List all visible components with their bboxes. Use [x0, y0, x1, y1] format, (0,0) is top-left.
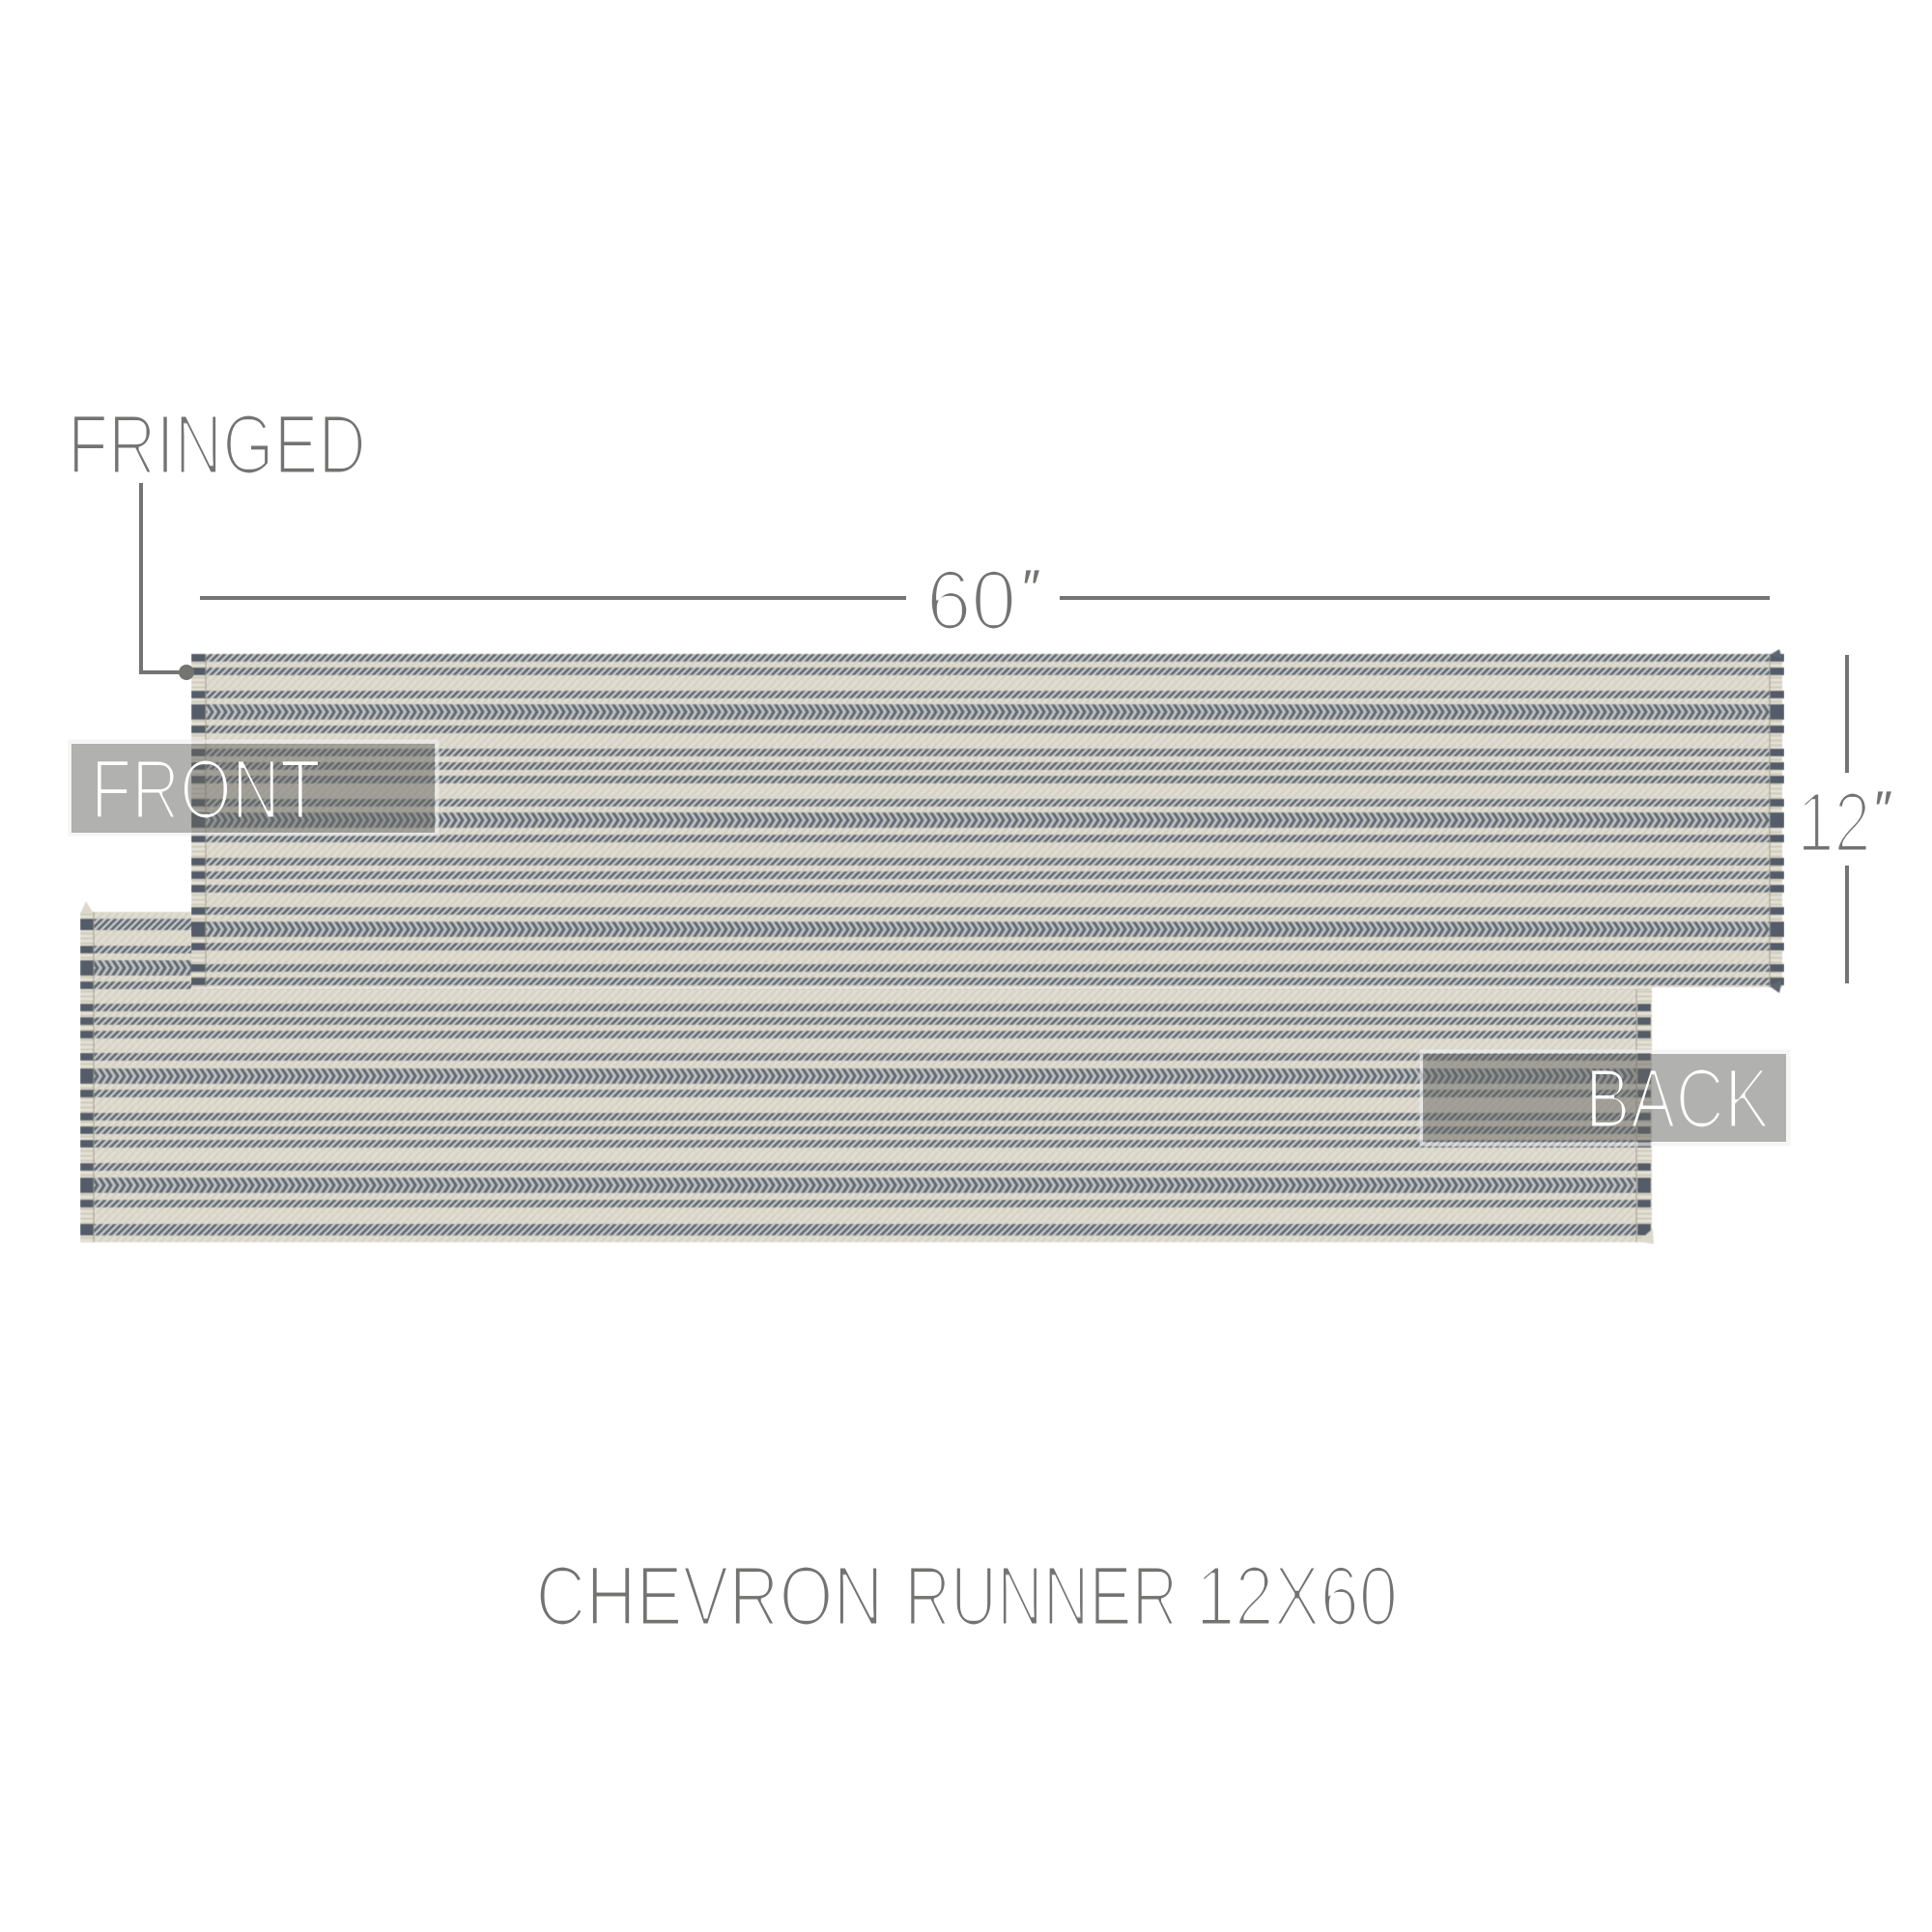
leader dot	[179, 665, 194, 680]
back fringe right	[1636, 986, 1652, 1242]
callout: fringed leader line	[141, 483, 194, 680]
label: FRINGED: FRINGED	[68, 398, 366, 492]
front narrow stripes	[191, 654, 1781, 985]
dimension: 60 inches: 60	[926, 554, 1016, 647]
front corner flares	[1770, 649, 1782, 993]
title: RUNNER	[904, 1549, 1178, 1643]
back fringe dark bars right	[1637, 919, 1651, 1236]
panel: front of runner	[191, 649, 1784, 993]
front stitch lines	[206, 654, 1770, 987]
dimension: 12 inches: ″	[1872, 781, 1891, 838]
back narrow stripes	[80, 919, 1652, 1236]
title: CHEVRON	[535, 1549, 883, 1643]
back fringe left	[80, 912, 94, 1242]
dimension: 12 inches: 12	[1797, 776, 1870, 869]
label box: BACK	[1422, 1051, 1789, 1144]
front fringe dark bars left	[191, 654, 206, 985]
dimension: 60 inches: ″	[1020, 560, 1039, 616]
front chevron stripes	[191, 704, 1781, 937]
label box: FRONT	[70, 742, 437, 835]
back fringe dark bars left	[80, 919, 94, 1236]
back corner flares	[80, 901, 1654, 1244]
panel: back of runner	[80, 901, 1654, 1244]
seam under front	[191, 987, 1652, 989]
label: FRONT: FRONT	[91, 743, 321, 837]
dimension line: width right	[1060, 596, 1770, 600]
front fringe right	[1770, 654, 1782, 987]
front fringe left	[191, 654, 206, 987]
title	[535, 1549, 1398, 1643]
dimension line: height top	[1845, 655, 1849, 773]
back chevron stripes	[80, 960, 1652, 1193]
back stitch lines	[94, 912, 1636, 1242]
title: 12X60	[1196, 1549, 1398, 1643]
dimension line: width left	[200, 596, 906, 600]
dimension line: height bottom	[1845, 866, 1849, 983]
label: BACK: BACK	[1585, 1052, 1770, 1146]
front fringe dark bars right	[1770, 654, 1784, 985]
